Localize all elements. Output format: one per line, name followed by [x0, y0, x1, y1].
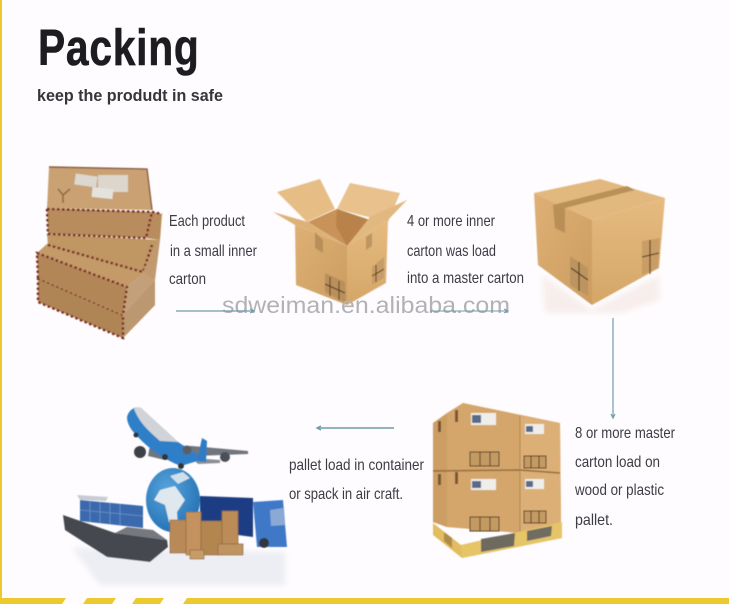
cartons — [433, 403, 561, 533]
text: step 2: 4 or more inner — [407, 213, 496, 230]
text: step 3: pallet. — [575, 512, 613, 529]
image: open carton — [273, 179, 407, 305]
arrow: step 4 to 5 — [317, 426, 394, 430]
text: step 3: 8 or more master — [575, 425, 676, 442]
middle-lower carton — [37, 243, 155, 315]
image: stack of small inner cartons — [37, 167, 162, 338]
image: sealed master carton — [534, 179, 665, 313]
text: step 1: in a small inner — [170, 243, 258, 260]
text: step 3 — [574, 425, 676, 529]
text: step 4 — [289, 457, 425, 503]
text: step 4: pallet load in container — [289, 457, 425, 474]
text: step 1: Each product — [169, 213, 245, 230]
text: step 3: wood or plastic — [574, 482, 664, 499]
wooden pallet — [433, 522, 562, 558]
subtitle: keep the produdt in safe — [37, 86, 223, 105]
text: step 3: carton load on — [575, 454, 660, 471]
delivery truck — [200, 496, 287, 548]
text: step 1: carton — [169, 271, 206, 288]
pile of cartons — [170, 511, 243, 559]
airplane — [127, 407, 248, 469]
text: step 2: into a master carton — [407, 270, 524, 287]
image: global transport — [63, 407, 287, 585]
middle-upper carton — [47, 234, 160, 280]
text: step 1 — [169, 213, 258, 288]
arrow: step 2 to 3 — [430, 309, 508, 313]
title: Packing — [38, 19, 199, 76]
arrow: step 3 to 4 — [611, 318, 615, 418]
floor reflection — [72, 548, 285, 585]
bottom carton — [38, 278, 155, 338]
image: cartons on pallet — [433, 403, 562, 558]
watermark: sdweiman.en.alibaba.com — [222, 292, 510, 318]
container ship — [63, 495, 168, 562]
arrow: step 1 to 2 — [176, 309, 254, 313]
text: step 2: carton was load — [407, 243, 496, 260]
text: step 4: or spack in air craft. — [289, 486, 403, 503]
globe — [146, 468, 200, 532]
top carton with stamps — [47, 167, 162, 240]
text: step 2 — [407, 213, 524, 287]
